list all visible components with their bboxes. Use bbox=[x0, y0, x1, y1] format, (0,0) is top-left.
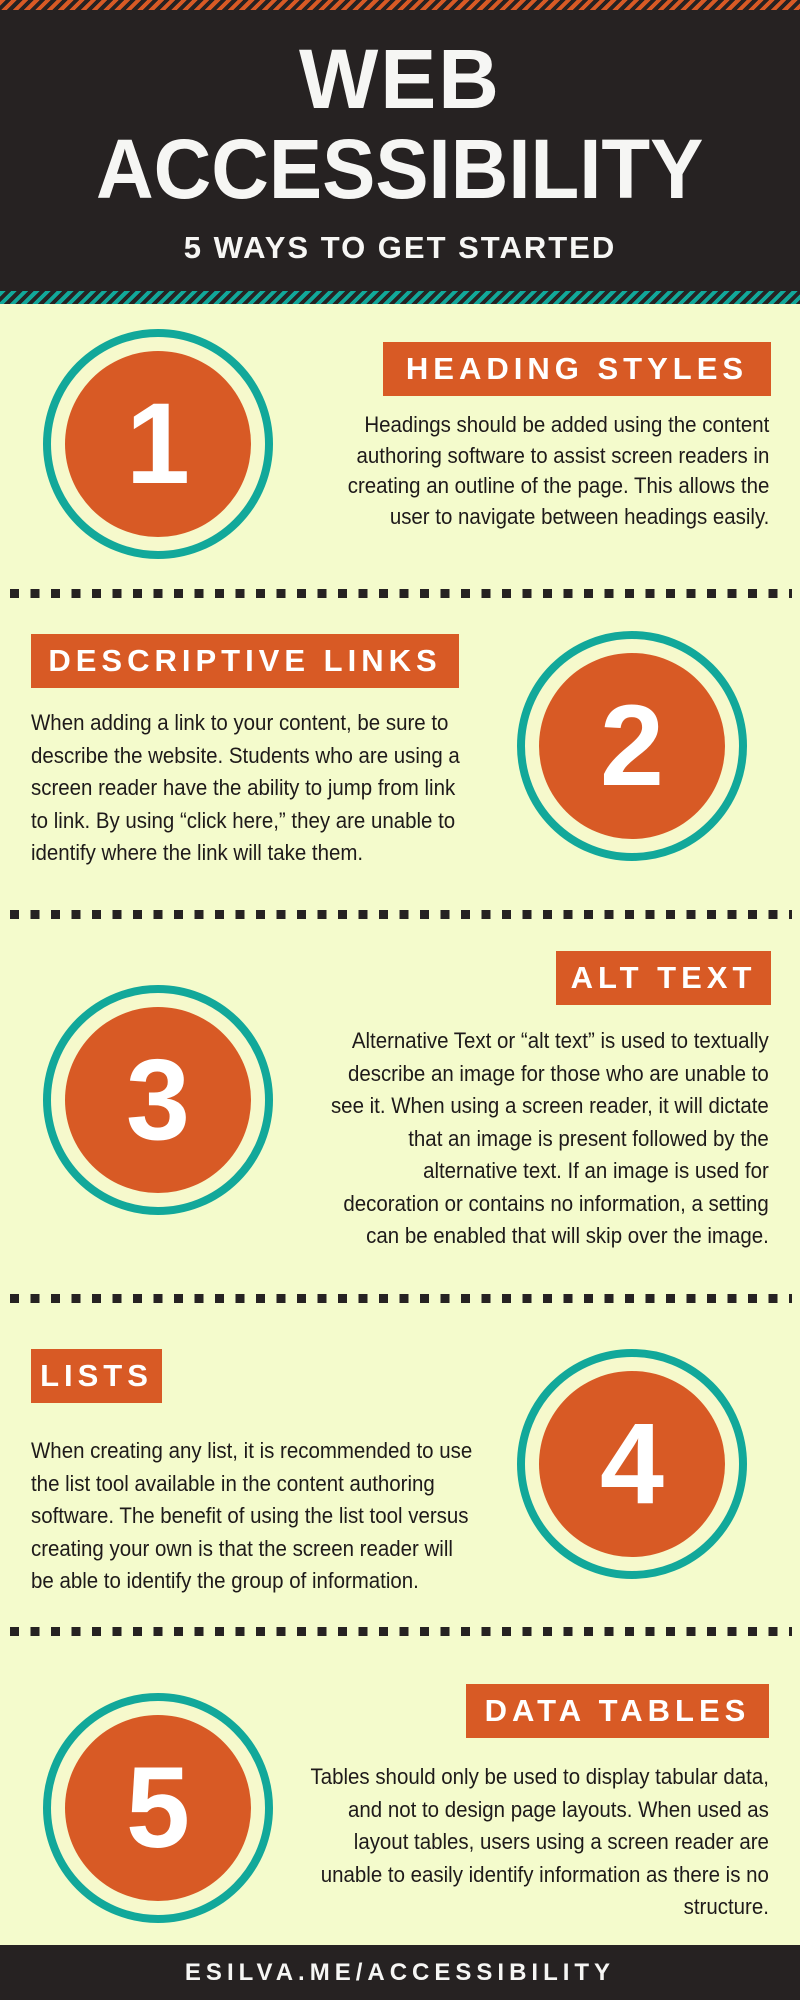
text: lists: the list tool available in the content authoring bbox=[31, 1470, 435, 1496]
title bbox=[96, 32, 704, 216]
icon: circle 5 bbox=[43, 1693, 273, 1923]
text: descriptive links: identify where the link will take them. bbox=[31, 840, 363, 865]
label: alt text: ALT TEXT bbox=[571, 960, 756, 995]
text: descriptive links: to link. By using “click here,” they are unable to bbox=[31, 808, 455, 832]
text: alt text: decoration or contains no information, a setting bbox=[344, 1190, 769, 1216]
text: descriptive links: When adding a link to your content, be sure to bbox=[31, 710, 448, 735]
title: ACCESSIBILITY bbox=[96, 122, 704, 216]
text: data tables: unable to easily identify information as there is no bbox=[321, 1862, 769, 1886]
footer bbox=[0, 1945, 800, 2000]
label: heading styles bbox=[383, 342, 771, 396]
text: alt text: see it. When using a screen reader, it will dictate bbox=[331, 1093, 769, 1118]
title: WEB bbox=[299, 32, 501, 126]
label: heading styles: HEADING STYLES bbox=[406, 351, 748, 386]
text: data tables: and not to design page layouts. When used as bbox=[348, 1796, 769, 1822]
text: heading styles: authoring software to assist screen readers in bbox=[356, 443, 769, 468]
text: data tables: structure. bbox=[684, 1894, 769, 1919]
text: alt text bbox=[331, 1028, 769, 1248]
text: heading styles: Headings should be added using the content bbox=[364, 412, 769, 437]
icon: circle 1: 1 bbox=[126, 380, 190, 508]
icon: circle 4: 4 bbox=[600, 1400, 664, 1528]
text: alt text: Alternative Text or “alt text” is used to textually bbox=[352, 1028, 769, 1053]
icon: circle 3 bbox=[43, 985, 273, 1215]
label: descriptive links: DESCRIPTIVE LINKS bbox=[48, 643, 442, 678]
text: lists: When creating any list, it is recommended to use bbox=[31, 1438, 472, 1463]
icon: circle 4 bbox=[517, 1349, 747, 1579]
icon: circle 2 bbox=[517, 631, 747, 861]
label: data tables: DATA TABLES bbox=[485, 1693, 750, 1728]
label: alt text bbox=[556, 951, 771, 1005]
header bbox=[0, 10, 800, 291]
label: lists: LISTS bbox=[40, 1358, 153, 1393]
label: data tables bbox=[466, 1684, 769, 1738]
text: heading styles bbox=[347, 412, 770, 529]
icon: circle 5: 5 bbox=[126, 1744, 190, 1872]
text: descriptive links bbox=[31, 710, 460, 865]
text: data tables bbox=[310, 1764, 769, 1919]
text: alt text: can be enabled that will skip over the image. bbox=[366, 1223, 769, 1248]
label: descriptive links bbox=[31, 634, 459, 688]
text: alt text: alternative text. If an image is used for bbox=[423, 1158, 769, 1183]
text: alt text: describe an image for those who are unable to bbox=[348, 1060, 769, 1086]
text: alt text: that an image is present followed by the bbox=[408, 1126, 769, 1150]
text: data tables: layout tables, users using a screen reader are bbox=[354, 1829, 769, 1854]
text: lists: be able to identify the group of information. bbox=[31, 1568, 419, 1593]
text: data tables: Tables should only be used to display tabular data, bbox=[311, 1764, 769, 1789]
text: descriptive links: screen reader have the ability to jump from link bbox=[31, 775, 455, 800]
text: heading styles: creating an outline of the page. This allows the bbox=[347, 473, 769, 498]
label: lists bbox=[31, 1349, 162, 1403]
icon: circle 2: 2 bbox=[600, 682, 664, 810]
icon: circle 1 bbox=[43, 329, 273, 559]
text: lists: creating your own is that the screen reader will bbox=[31, 1536, 453, 1560]
text: lists: software. The benefit of using the list tool versus bbox=[31, 1503, 468, 1528]
text: descriptive links: describe the website. Students who are using a bbox=[31, 742, 460, 768]
footer: ESILVA.ME/ACCESSIBILITY bbox=[185, 1959, 615, 1986]
icon: circle 3: 3 bbox=[126, 1036, 190, 1164]
subtitle: 5 WAYS TO GET STARTED bbox=[184, 230, 616, 265]
text: lists bbox=[31, 1438, 472, 1593]
text: heading styles: user to navigate between headings easily. bbox=[389, 504, 769, 529]
